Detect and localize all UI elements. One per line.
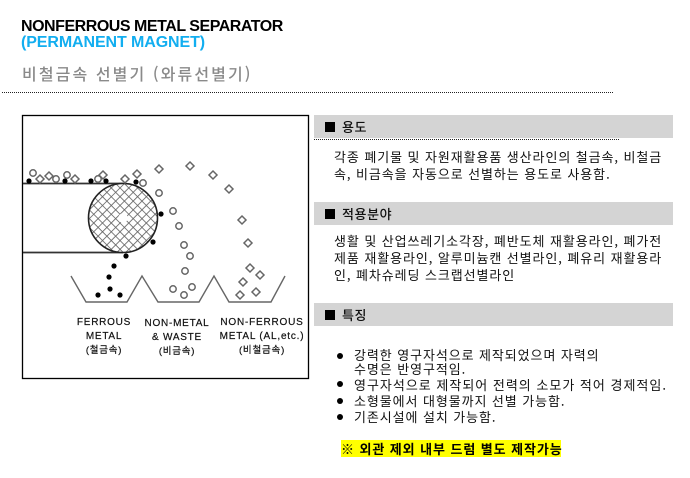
collection bins bbox=[71, 276, 285, 302]
label: non-ferrous metal: METAL (AL,etc.) bbox=[220, 331, 304, 342]
usage text: 속, 비금속을 자동으로 선별하는 용도로 사용함. bbox=[334, 164, 611, 183]
label: ferrous metal: (철금속) bbox=[86, 345, 122, 356]
feature 1 text: 강력한 영구자석으로 제작되었으며 자력의 bbox=[354, 345, 600, 364]
magnetic drum bbox=[88, 184, 158, 252]
label: non-ferrous metal: NON-FERROUS bbox=[220, 317, 304, 328]
ferrous metal particles bbox=[26, 178, 164, 298]
label: non-metal and waste: NON-METAL bbox=[145, 318, 209, 329]
panel heading: usage: 용도 bbox=[342, 117, 367, 136]
diagram frame bbox=[22, 116, 308, 378]
bullet 1 bbox=[337, 353, 343, 359]
non-ferrous metal particles bbox=[36, 162, 264, 299]
highlighted note: ※ 외관 제외 내부 드럼 별도 제작가능 bbox=[341, 439, 563, 458]
bullet 3 bbox=[337, 398, 343, 404]
panel heading: application fields bbox=[314, 202, 673, 225]
header dotted rule bbox=[2, 92, 613, 93]
bullet 2 bbox=[337, 381, 343, 387]
non-metal particles bbox=[30, 170, 195, 298]
bullet 4 bbox=[337, 414, 343, 420]
features bullet list bbox=[337, 345, 667, 426]
label: non-ferrous metal: (비철금속) bbox=[239, 345, 285, 356]
application fields text: 인, 폐차슈레딩 스크랩선별라인 bbox=[334, 265, 515, 284]
label: non-metal and waste: & WASTE bbox=[152, 332, 202, 343]
panel heading: application fields: 적용분야 bbox=[342, 204, 392, 223]
feature 3 text: 소형물에서 대형물까지 선별 가능함. bbox=[354, 391, 565, 410]
title: NONFERROUS METAL SEPARATOR bbox=[21, 18, 283, 35]
panel heading: features bbox=[314, 303, 673, 326]
panel heading: usage bbox=[314, 115, 673, 138]
usage text: 각종 폐기물 및 자원재활용품 생산라인의 철금속, 비철금 bbox=[334, 147, 662, 166]
Korean subtitle: 비철금속 선별기 (와류선별기) bbox=[22, 61, 253, 85]
feature 2 text: 영구자석으로 제작되어 전력의 소모가 적어 경제적임. bbox=[354, 375, 667, 394]
usage text bbox=[334, 147, 662, 183]
feature 4 text: 기존시설에 설치 가능함. bbox=[354, 407, 496, 426]
feature 1 text bbox=[354, 345, 600, 378]
label: non-metal and waste: (비금속) bbox=[159, 346, 195, 357]
application fields text: 생활 및 산업쓰레기소각장, 폐반도체 재활용라인, 폐가전 bbox=[334, 231, 662, 250]
subtitle: permanent magnet: (PERMANENT MAGNET) bbox=[21, 34, 205, 51]
panel heading: features: 특징 bbox=[342, 305, 367, 324]
application fields text: 제품 재활용라인, 알루미늄캔 선별라인, 폐유리 재활용라 bbox=[334, 248, 662, 267]
application fields text bbox=[334, 231, 662, 284]
conveyor belt bbox=[23, 184, 123, 252]
feature 1 text: 수명은 반영구적임. bbox=[354, 359, 466, 378]
label: ferrous metal: FERROUS bbox=[77, 317, 131, 328]
label: ferrous metal: METAL bbox=[86, 331, 122, 342]
heading dotted rule bbox=[314, 139, 619, 140]
